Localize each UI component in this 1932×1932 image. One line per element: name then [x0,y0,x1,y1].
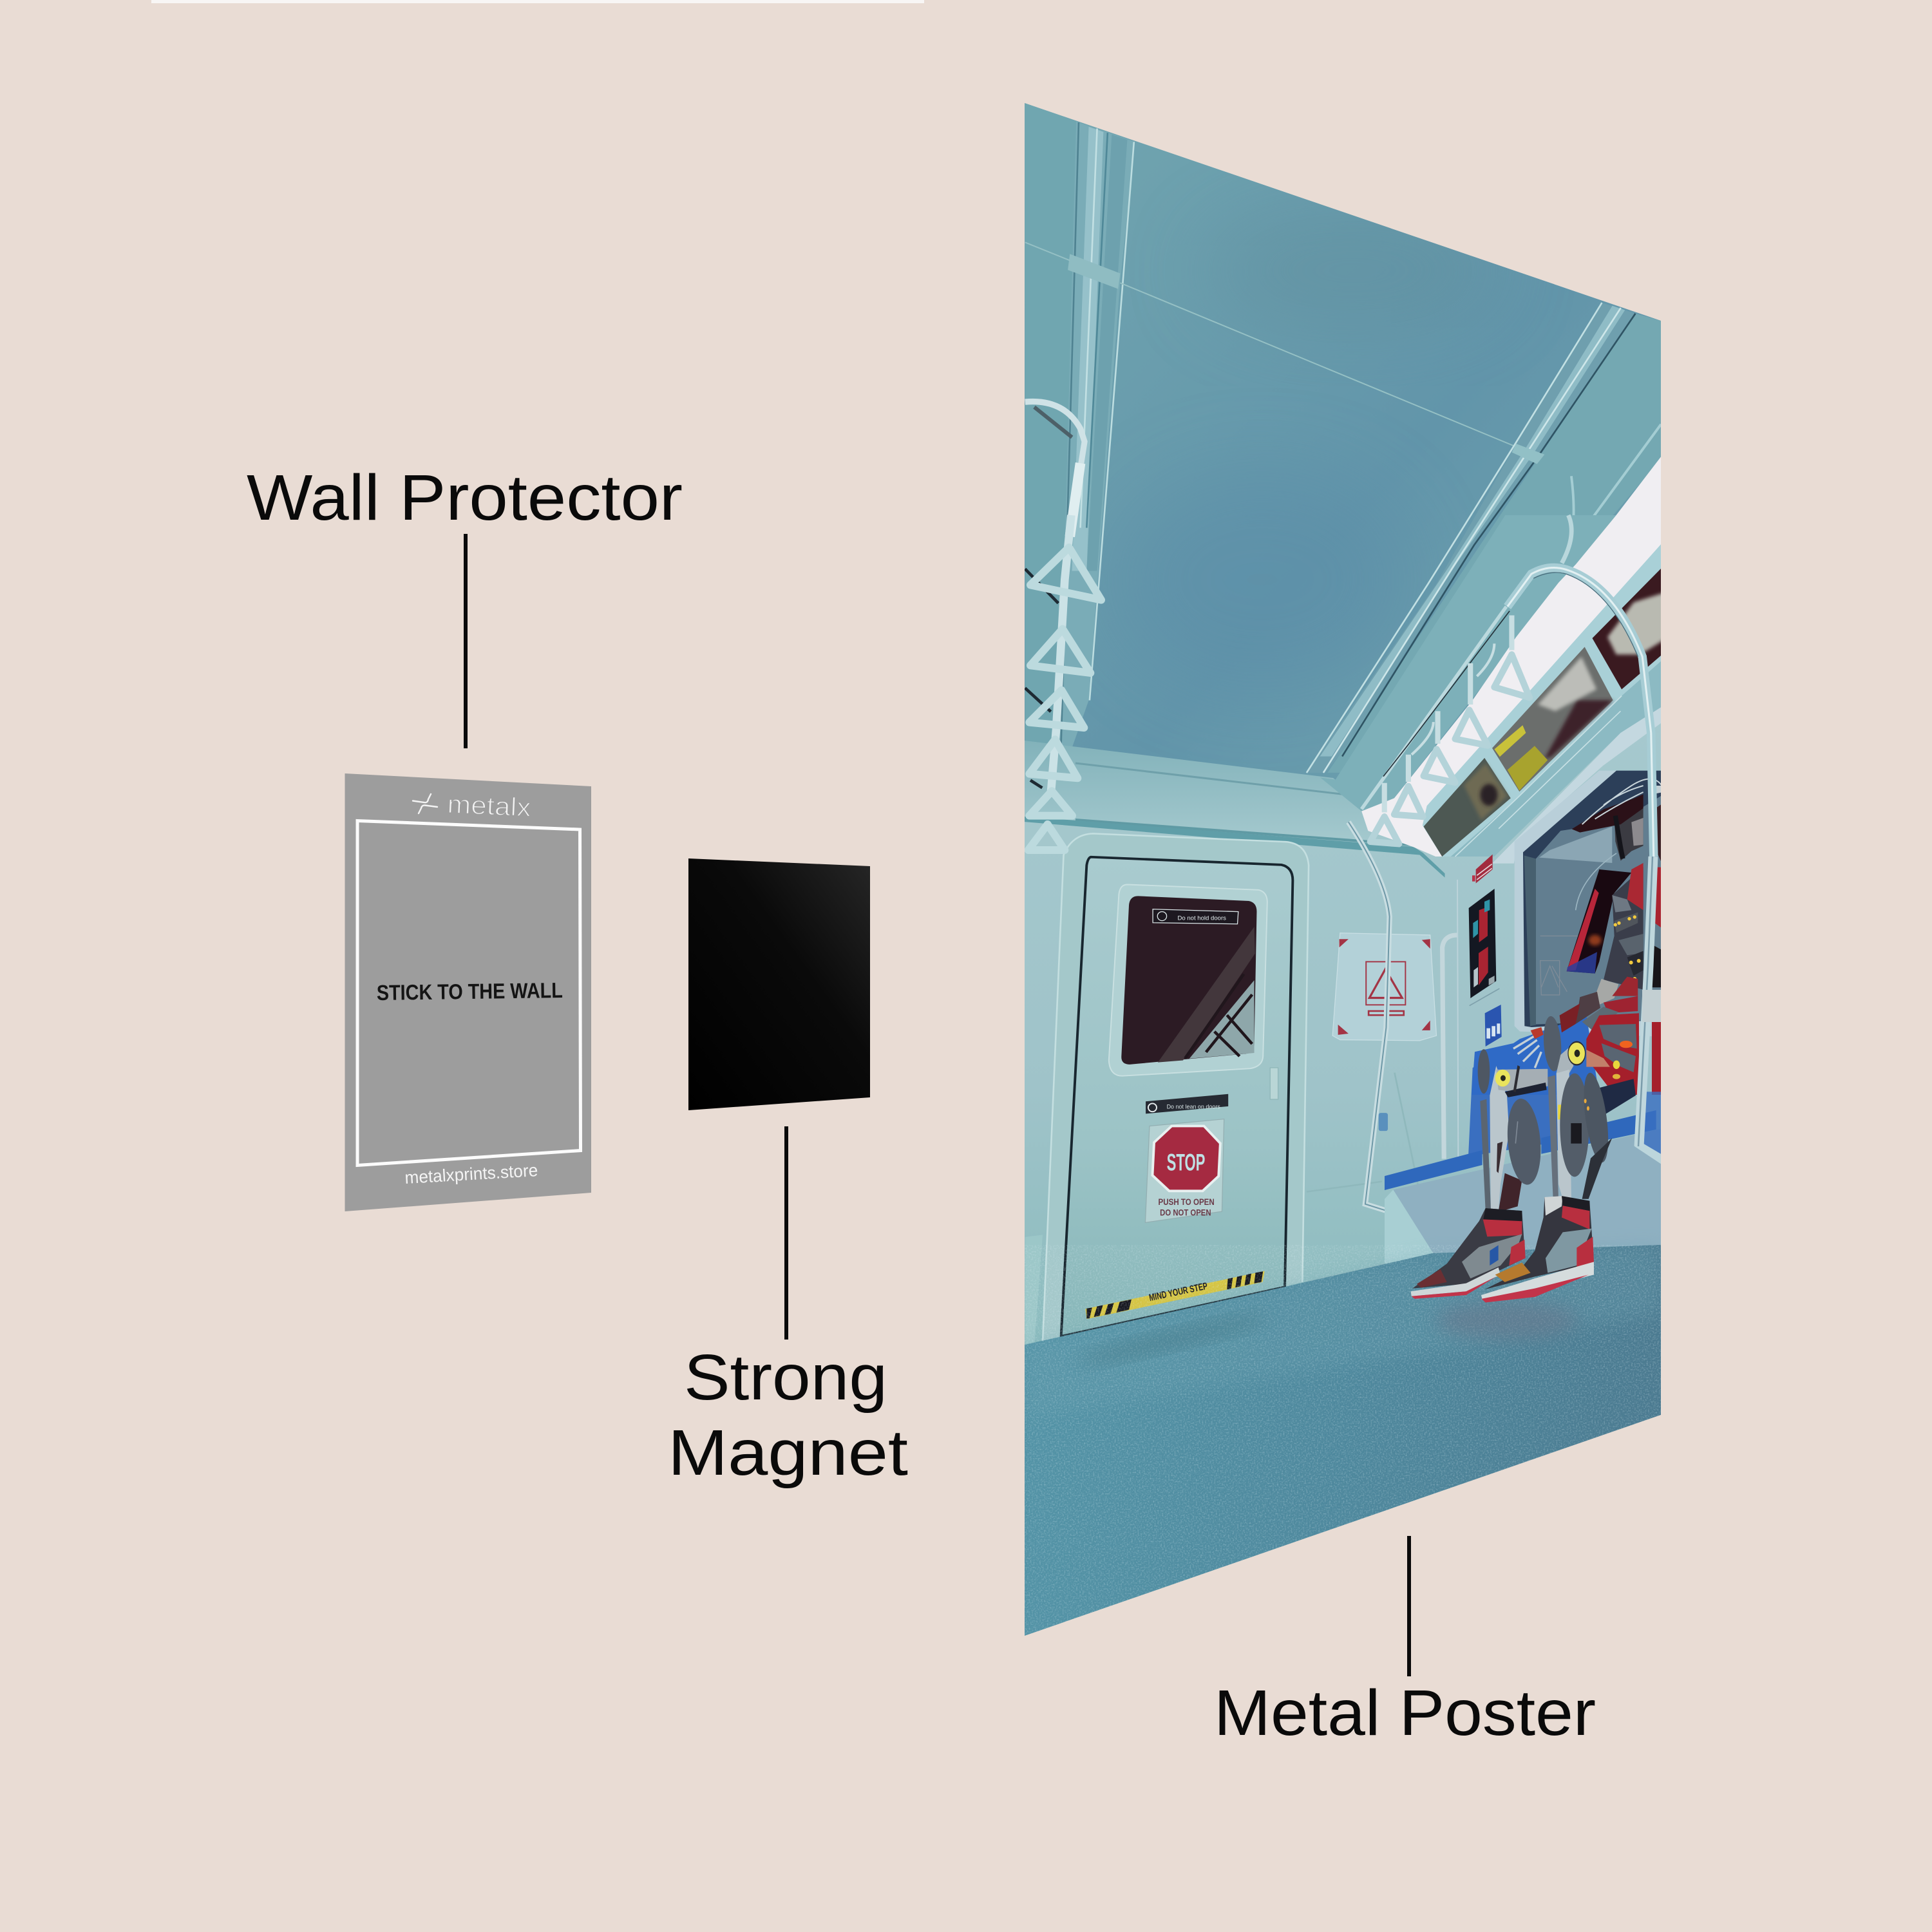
icon: metalx logo mark [413,794,437,813]
door warning label [1146,1094,1228,1113]
robot right leg [1542,1014,1636,1203]
mind your step strip: MIND YOUR STEP [1148,1281,1209,1303]
seat base [1393,1129,1661,1255]
ad panel frame [1423,536,1669,857]
mind your step strip [1085,1271,1265,1319]
ad panel: top [1592,561,1669,689]
right sneaker [1484,1197,1594,1289]
upper right corner: light strip, ad panels and handles [1320,515,1669,864]
window, notices and robot upper body [1469,771,1663,1095]
system poster [1469,889,1499,1006]
window frame [1515,771,1663,1037]
sheet [345,773,591,1211]
red notice [1472,855,1493,884]
white strip at top edge [151,0,924,3]
robot arms and hands [1513,977,1638,1068]
triangle handles [1370,654,1530,844]
seat back [1468,1040,1599,1157]
lower blue seat back [1472,1016,1599,1095]
stop sign panel [1145,1119,1224,1222]
left grab rail and handles [1025,402,1101,850]
panel: wall protector sheet [345,773,591,1211]
door slot [1270,1068,1278,1099]
ad panel: middle [1492,647,1613,791]
icon: stop octagon [1152,1126,1220,1191]
strap stems [1385,615,1511,812]
leader line: Strong Magnet [784,1126,788,1340]
torso lights [1614,915,1641,981]
robot cape [1567,869,1631,974]
robot head and hat [1572,779,1663,867]
panel: metal poster artwork [1018,103,1669,1639]
glass partition [1634,1084,1661,1164]
logo wordmark: metalx [447,790,531,822]
blue seat bar [1385,1150,1482,1190]
door warning label: Do not lean on doors [1167,1104,1220,1111]
wall fire warning sign [1332,933,1436,1041]
robot left leg [1478,1049,1548,1212]
label: Strong Magnet: Magnet [668,1417,908,1489]
robot lap armour [1586,1013,1663,1095]
white frame [357,820,581,1166]
panel: strong magnet [688,858,870,1110]
centre grab pole [1349,822,1407,1217]
ceiling header and wall [1025,708,1661,1349]
large curved pole [1508,567,1654,857]
sneakers [1411,1196,1594,1302]
instruction text: STICK TO THE WALL [377,979,563,1005]
stop sign panel: STOP [1167,1149,1205,1175]
robot legs and sneakers [1411,1014,1661,1302]
lower large pole [1638,857,1661,1146]
pale band above window [1492,703,1669,864]
rail [1025,402,1084,536]
stop sign panel: DO NOT OPEN [1160,1208,1211,1218]
panel above lights [1320,515,1616,811]
label: Strong Magnet [668,1341,908,1489]
right handles and large curved pole [1370,567,1654,857]
robot torso [1604,863,1663,990]
label: Wall Protector: Wall Protector [247,462,683,534]
floor [1025,1245,1661,1639]
door window bezel [1109,884,1267,1076]
left sneaker [1412,1208,1525,1289]
window sticker: Do not hold doors [1177,914,1226,922]
window sticker [1153,909,1238,924]
door panel [1061,857,1293,1336]
ceiling light strip top [1614,457,1661,518]
ceiling right moulding [1307,303,1661,773]
teal band under ad panels [1451,654,1669,857]
stop sign panel: PUSH TO OPEN [1159,1197,1215,1207]
ad panel: lower [1424,758,1511,857]
ceiling side rail [1361,607,1506,809]
ceiling left moulding [1025,103,1135,752]
label: Metal Poster: Metal Poster [1214,1677,1596,1749]
leader line: Wall Protector [464,534,468,748]
wall, door and signage [1018,708,1661,1349]
triangle handles [1028,547,1101,850]
blue notice [1485,1005,1502,1046]
website text: metalxprints.store [404,1160,538,1188]
ceiling seam line [1025,242,1513,446]
leader line: Metal Poster [1407,1536,1411,1676]
light strip [1361,515,1669,857]
seat and right wall [1385,1040,1661,1264]
hand rail [1443,935,1457,1159]
door window [1121,896,1256,1065]
door surround [1043,833,1309,1341]
label: Strong Magnet: Strong [684,1341,887,1414]
ceiling [1025,103,1661,811]
